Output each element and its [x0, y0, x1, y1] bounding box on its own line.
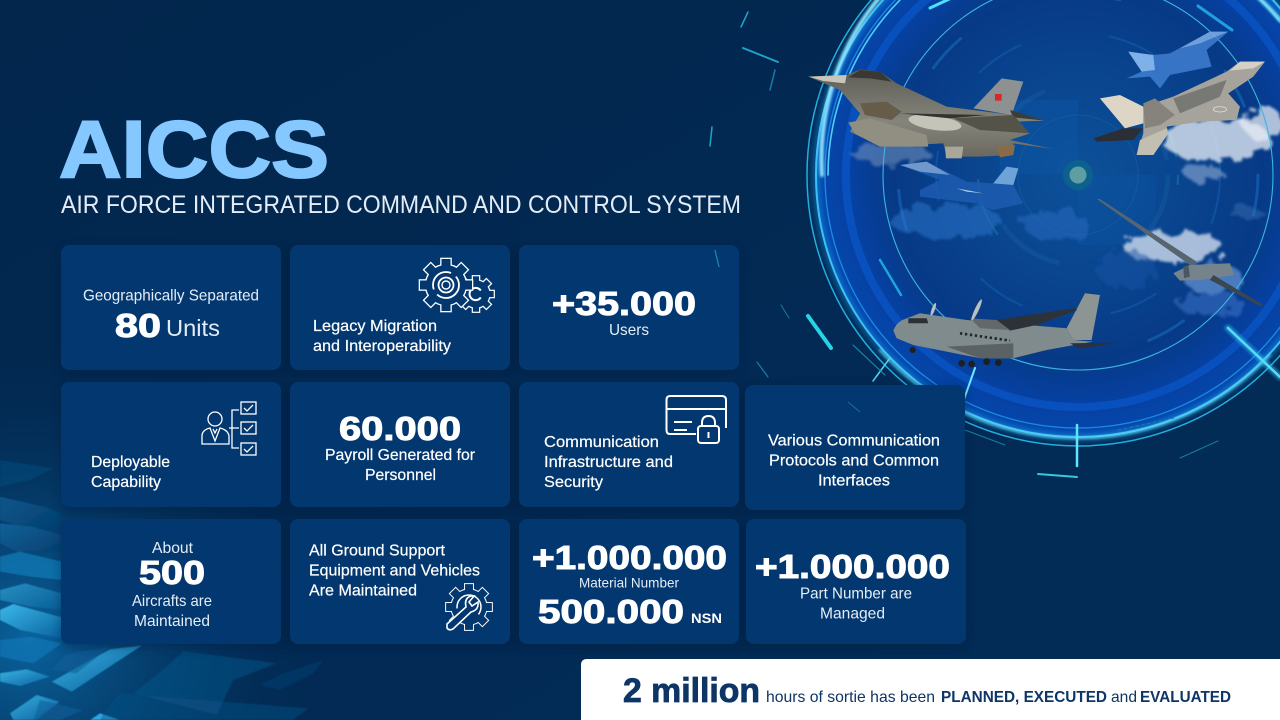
- glowing rings: [807, 0, 1280, 446]
- text: ground support: [309, 542, 480, 600]
- text: communication infrastructure: Communication: [544, 434, 659, 451]
- panel: part number: [746, 519, 966, 644]
- text: communication infrastructure: Infrastructure and: [544, 454, 673, 471]
- number: +35.000: +35.000: [552, 285, 696, 322]
- title: AICCS: [59, 105, 329, 195]
- text: ground support: Equipment and Vehicles: [309, 562, 480, 580]
- text: part number managed: Managed: [820, 606, 885, 622]
- clouds: [850, 107, 1280, 315]
- radar disc: [816, 0, 1280, 437]
- icon: person with checklist: [202, 402, 256, 455]
- number: 500.000 NSN: [538, 593, 722, 630]
- panel: users: [519, 245, 739, 370]
- icon: gear with wrench: [446, 584, 492, 630]
- text: aircrafts are maintained: Maintained: [134, 613, 210, 630]
- text: sortie statement: hours of sortie has been: [766, 689, 935, 706]
- text: legacy migration: and Interoperability: [313, 338, 451, 355]
- number: 60.000: 60.000: [339, 410, 461, 447]
- center dot: [1063, 160, 1093, 190]
- panel: ground support: [290, 519, 510, 644]
- text: sortie statement: EVALUATED: [1140, 689, 1231, 706]
- icon: gears: [420, 259, 494, 312]
- text: aircrafts are maintained: [132, 593, 212, 630]
- panel: payroll: [290, 382, 510, 507]
- number: 80 units: 80: [115, 307, 161, 344]
- panel: deployable capability: [61, 382, 281, 507]
- panel: communication infrastructure: [519, 382, 739, 507]
- text: aircrafts are maintained: Aircrafts are: [132, 593, 212, 610]
- text: communication protocols: Interfaces: [818, 472, 890, 490]
- aircraft: F-16: [808, 69, 1053, 158]
- text: communication protocols: Various Communication: [768, 432, 940, 450]
- number: 80 units: Units: [166, 315, 220, 341]
- aircraft: KAAN fighter: [1093, 62, 1265, 155]
- callout: sortie hours bar: [581, 659, 1280, 720]
- panel: material number: [519, 519, 739, 644]
- text: payroll generated: Personnel: [365, 467, 436, 484]
- number: 80 units: [115, 307, 220, 344]
- text: communication protocols: Protocols and Common: [769, 452, 939, 470]
- text: material number: Material Number: [579, 574, 679, 590]
- number: 500: 500: [139, 554, 205, 591]
- number: +1.000.000 part: +1.000.000: [755, 548, 950, 585]
- number: +1.000.000: +1.000.000: [532, 539, 727, 576]
- panel shadows: [61, 249, 966, 648]
- text: part number managed: Part Number are: [800, 586, 912, 602]
- text: communication protocols: [768, 432, 940, 490]
- text: communication infrastructure: [544, 434, 673, 491]
- text: ground support: All Ground Support: [309, 542, 446, 560]
- panel: aircrafts maintained: [61, 519, 281, 644]
- panel: geographically separated units: [61, 245, 281, 370]
- arc ticks and light flares: [710, 0, 1280, 477]
- text: about: About: [152, 540, 194, 557]
- number: 500.000 NSN: 500.000: [538, 593, 684, 630]
- text: sortie statement: PLANNED, EXECUTED: [941, 689, 1107, 706]
- number: 2 million: 2 million: [623, 672, 760, 710]
- text: legacy migration: Legacy Migration: [313, 318, 437, 335]
- text: geographically separated: Geographically Separated: [83, 288, 259, 304]
- aircraft: drone: [1097, 199, 1263, 306]
- number: 500.000 NSN: NSN: [691, 610, 722, 626]
- text: sortie statement: [766, 689, 1231, 706]
- radar disc with aircraft: [710, 0, 1280, 477]
- aircraft group: [808, 32, 1265, 367]
- aircraft: CN-235 transport: [893, 293, 1118, 367]
- text: deployable capability: Deployable: [91, 454, 170, 471]
- aircraft: ghost blue fighter top: [1127, 32, 1228, 88]
- subtitle: AIR FORCE INTEGRATED COMMAND AND CONTROL SYSTEM: [61, 191, 741, 219]
- panel: communication protocols: [745, 385, 965, 510]
- text: payroll generated: [325, 447, 476, 484]
- icon: card with lock: [666, 396, 726, 443]
- text: legacy migration: [313, 318, 451, 355]
- text: ground support: Are Maintained: [309, 582, 417, 600]
- panel: legacy migration: [290, 245, 510, 370]
- text: deployable capability: Capability: [91, 474, 161, 491]
- text: deployable capability: [91, 454, 170, 491]
- text: part number managed: [800, 586, 912, 622]
- aircraft: ghost blue F-16: [900, 162, 1023, 210]
- text: sortie statement: and: [1111, 689, 1137, 706]
- text: users: Users: [609, 322, 649, 339]
- text: payroll generated: Payroll Generated for: [325, 447, 476, 464]
- background: glowing tile pattern: [0, 300, 400, 720]
- text: communication infrastructure: Security: [544, 474, 603, 491]
